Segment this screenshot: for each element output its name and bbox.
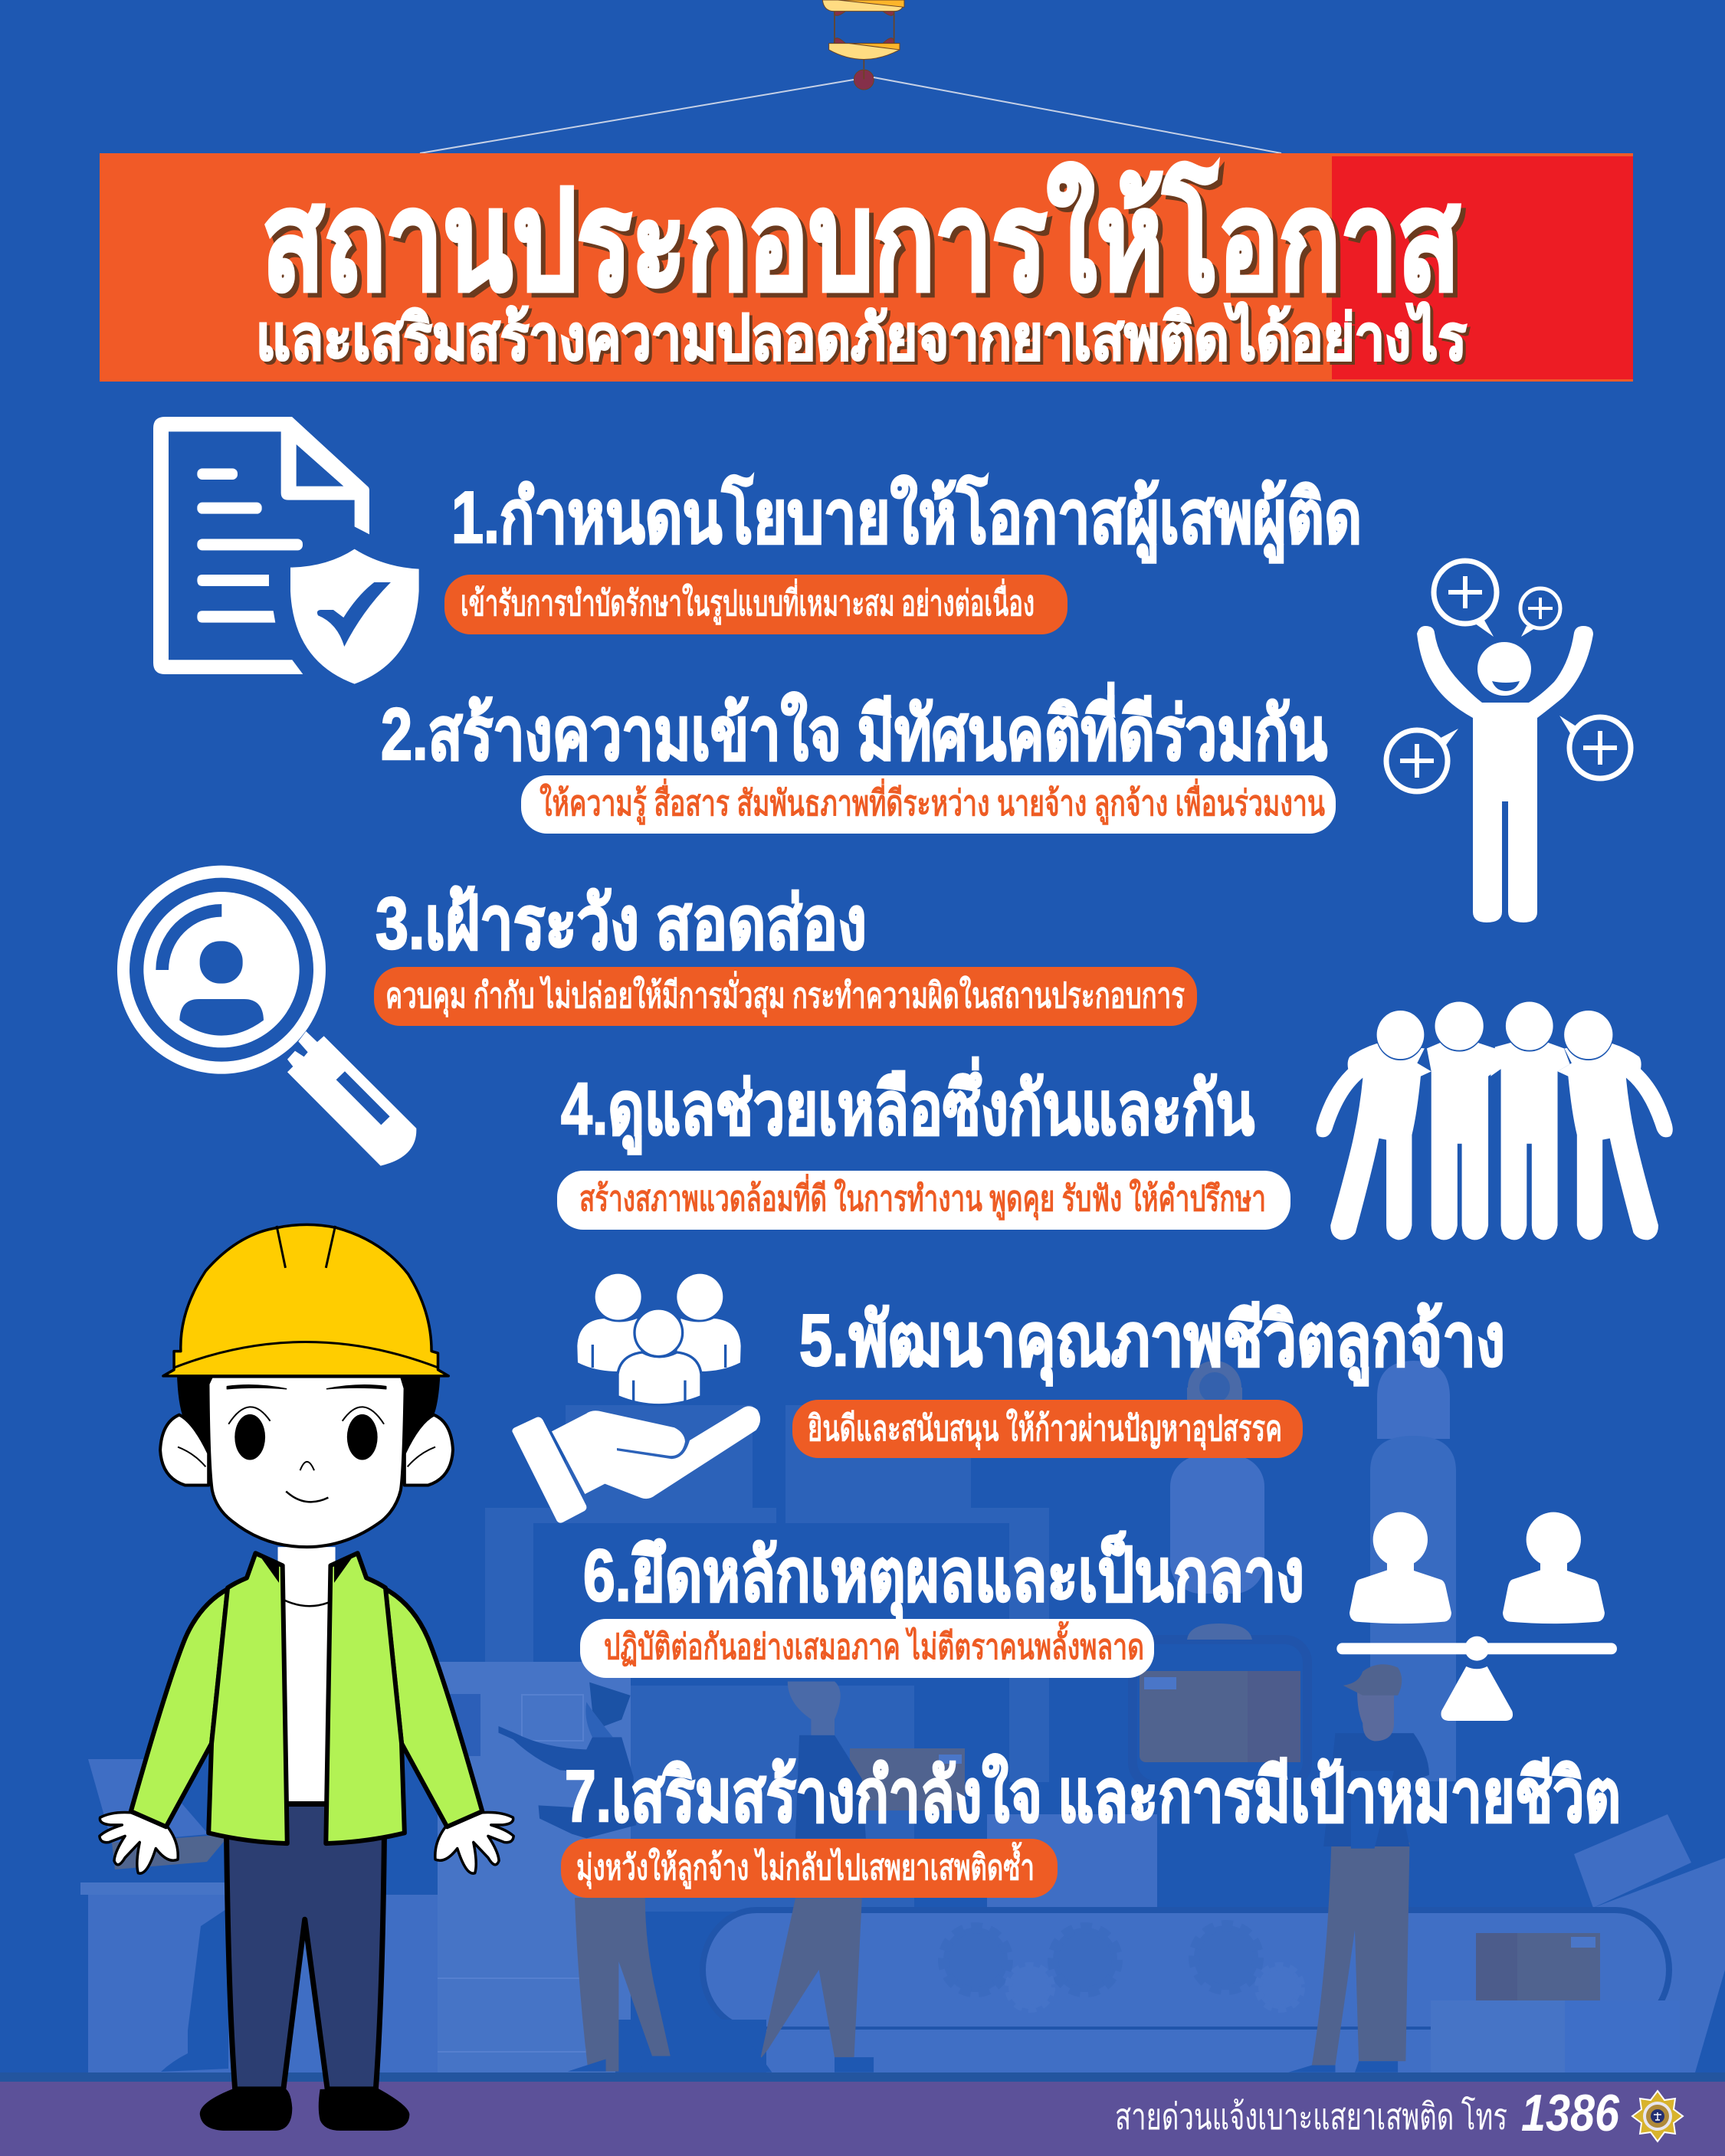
- hard hat: [163, 1224, 448, 1376]
- hair: [177, 1373, 441, 1460]
- pill 3: [374, 967, 1197, 1026]
- nose: [300, 1462, 314, 1470]
- pill 6: ปฏิบัติต่อกันอย่างเสมอภาค ไม่ตีตราคนพลั้งพลาด: [604, 1620, 1144, 1666]
- subtitle shadow: และเสริมสร้างความปลอดภัยจากยาเสพติดได้อย่างไร: [259, 305, 1470, 376]
- collar line: [284, 1600, 328, 1606]
- trousers: [226, 1804, 385, 2089]
- shirt: [278, 1547, 336, 1807]
- icon: hand holding people: [512, 1274, 760, 1523]
- pill 1: [444, 575, 1067, 634]
- footer hotline text: สายด่วนแจ้งเบาะแสยาเสพติด โทร: [1115, 2095, 1507, 2138]
- face: [208, 1377, 405, 1547]
- right hand: [435, 1813, 513, 1873]
- right shoe: [319, 2088, 409, 2131]
- icon: person with plus bubbles: [1386, 561, 1631, 922]
- pill 5: ยินดีและสนับสนุน ให้ก้าวผ่านปัญหาอุปสรรค: [808, 1407, 1282, 1450]
- factory background scene: [80, 1361, 1725, 2072]
- pill 2: ให้ความรู้ สื่อสาร สัมพันธภาพที่ดีระหว่าง นายจ้าง ลูกจ้าง เพื่อนร่วมงาน: [539, 778, 1325, 825]
- left ear: [160, 1415, 208, 1486]
- pill 6: [580, 1619, 1154, 1678]
- hotline number: 1386: [1521, 2084, 1620, 2142]
- hat details: [173, 1226, 439, 1368]
- pill 3: ควบคุม กำกับ ไม่ปล่อยให้มีการมั่วสุม กระทำความผิดในสถานประกอบการ: [385, 971, 1185, 1017]
- pill 4: สร้างสภาพแวดล้อมที่ดี ในการทำงาน พูดคุย รับฟัง ให้คำปรึกษา: [579, 1174, 1266, 1221]
- heading 4: 4.ดูแลช่วยเหลือซึ่งกันและกัน: [561, 1057, 1254, 1155]
- jacket right: [326, 1552, 482, 1843]
- eyelids: [228, 1407, 384, 1424]
- subtitle: และเสริมสร้างความปลอดภัยจากยาเสพติดได้อย่างไร: [256, 302, 1467, 373]
- heading 1: 1.กำหนดนโยบายให้โอกาสผู้เสพผู้ติด: [451, 475, 1362, 563]
- pill 1: เข้ารับการบำบัดรักษาในรูปแบบที่เหมาะสม อย่างต่อเนื่อง: [461, 578, 1035, 625]
- icon: magnifier with person: [117, 866, 416, 1166]
- icon: emblem: [1632, 2091, 1683, 2141]
- footer band: [0, 2072, 1725, 2156]
- banner hanging ropes: [420, 77, 1281, 153]
- icon: group of four embracing: [1316, 1001, 1673, 1240]
- eyes: [234, 1414, 378, 1460]
- pill 5: [792, 1400, 1303, 1458]
- heading 3: 3.เฝ้าระวัง สอดส่อง: [375, 883, 867, 965]
- title banner: [100, 153, 1633, 382]
- pill 7: [561, 1839, 1058, 1898]
- heading 5: 5.พัฒนาคุณภาพชีวิตลูกจ้าง: [799, 1299, 1505, 1386]
- icon: document with shield: [153, 417, 419, 684]
- jacket left: [131, 1552, 287, 1843]
- pill 4: [557, 1171, 1290, 1230]
- pill 7: มุ่งหวังให้ลูกจ้าง ไม่กลับไปเสพยาเสพติดซ้ำ: [576, 1841, 1035, 1889]
- ear lines: [178, 1447, 435, 1466]
- left hand: [100, 1813, 178, 1873]
- crane hook: [822, 0, 904, 90]
- left shoe: [200, 2088, 292, 2131]
- right ear: [405, 1415, 453, 1486]
- icon: balance scale with two people: [1336, 1512, 1617, 1721]
- mouth: [286, 1492, 328, 1502]
- pill 2: [521, 775, 1336, 834]
- eyebrows: [227, 1385, 386, 1389]
- character: construction worker: [100, 1224, 513, 2131]
- heading 6: 6.ยึดหลักเหตุผลและเป็นกลาง: [583, 1531, 1304, 1621]
- heading 2: 2.สร้างความเข้าใจ มีทัศนคติที่ดีร่วมกัน: [381, 682, 1327, 775]
